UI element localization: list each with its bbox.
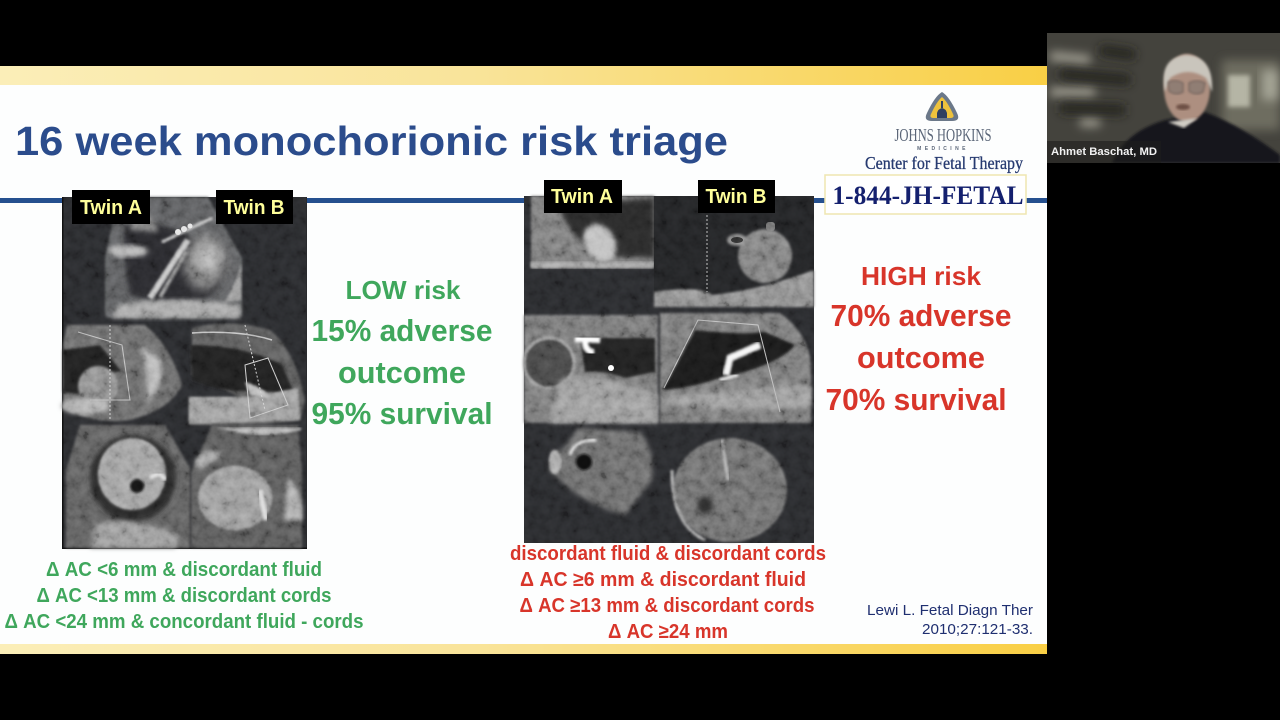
image: cord insertion twin B bbox=[660, 313, 811, 423]
icon: Johns Hopkins shield bbox=[926, 92, 958, 121]
label: Twin A bbox=[72, 190, 150, 224]
citation bbox=[867, 602, 1033, 638]
image: abdominal circumference twin B bbox=[191, 425, 302, 548]
top gold bar bbox=[0, 66, 1047, 85]
logo: Johns Hopkins Center for Fetal Therapy: MEDICINE bbox=[917, 146, 969, 152]
image: abdominal circumference twin A bbox=[66, 425, 190, 548]
image: twin A fetus top bbox=[531, 196, 654, 268]
citation: 2010;27:121-33. bbox=[922, 621, 1033, 638]
person: shoulders bbox=[1112, 112, 1280, 163]
image: abdominal section twin B bbox=[672, 438, 787, 542]
logo: Johns Hopkins Center for Fetal Therapy bbox=[865, 92, 1023, 173]
title: 16 week monochorionic risk triage bbox=[15, 118, 728, 164]
text block: low risk criteria: Δ AC <13 mm & discordant cords bbox=[36, 585, 332, 607]
text block: high risk criteria bbox=[510, 543, 826, 643]
label: Twin B: Twin B bbox=[706, 186, 766, 208]
callout: low risk: outcome bbox=[338, 355, 466, 390]
logo: Johns Hopkins Center for Fetal Therapy: JOHNS HOPKINS bbox=[894, 125, 992, 145]
bottom gold bar bbox=[0, 644, 1047, 654]
text block: high risk criteria: discordant fluid & discordant cords bbox=[510, 543, 826, 565]
phone number box: 1-844-JH-FETAL bbox=[832, 181, 1024, 210]
text block: low risk criteria: Δ AC <6 mm & discordant fluid bbox=[46, 559, 322, 581]
person: head bbox=[1164, 54, 1212, 128]
image: cord insertion twin A bbox=[524, 315, 658, 423]
label: Twin A: Twin A bbox=[80, 197, 142, 219]
label: Twin B bbox=[216, 190, 293, 224]
label: Twin A: Twin A bbox=[551, 186, 613, 208]
callout: low risk: LOW risk bbox=[346, 275, 461, 305]
image: placental insertion twin A bbox=[61, 325, 182, 421]
image: placental insertion twin B bbox=[189, 323, 305, 425]
image: cord ultrasound top bbox=[105, 197, 242, 318]
panel: low risk ultrasound montage bbox=[61, 190, 307, 549]
citation: Lewi L. Fetal Diagn Ther bbox=[867, 602, 1033, 619]
callout: high risk: 70% adverse bbox=[830, 298, 1012, 333]
image: twin B fetus top bbox=[654, 196, 814, 307]
logo: Johns Hopkins Center for Fetal Therapy: Center for Fetal Therapy bbox=[865, 153, 1023, 173]
callout: high risk: HIGH risk bbox=[861, 261, 982, 291]
panel: high risk ultrasound montage bbox=[524, 180, 814, 543]
text block: low risk criteria: Δ AC <24 mm & concordant fluid - cords bbox=[4, 611, 364, 633]
callout: low risk: 95% survival bbox=[312, 396, 492, 431]
image: abdominal section twin A bbox=[549, 428, 652, 515]
webcam: presenter video: Ahmet Baschat, MD bbox=[1051, 146, 1157, 158]
callout: high risk: outcome bbox=[857, 340, 985, 375]
webcam: presenter video bbox=[1047, 33, 1280, 163]
text block: low risk criteria bbox=[4, 559, 364, 633]
label: Twin B: Twin B bbox=[224, 197, 284, 219]
callout: low risk bbox=[312, 275, 492, 431]
callout: high risk bbox=[826, 261, 1012, 417]
callout: high risk: 70% survival bbox=[826, 382, 1006, 417]
text block: high risk criteria: Δ AC ≥6 mm & discordant fluid bbox=[520, 569, 806, 591]
label: Twin B bbox=[698, 180, 775, 213]
label: Twin A bbox=[544, 180, 622, 213]
text block: high risk criteria: Δ AC ≥24 mm bbox=[608, 621, 728, 643]
text block: high risk criteria: Δ AC ≥13 mm & discordant cords bbox=[520, 595, 814, 617]
callout: low risk: 15% adverse bbox=[312, 313, 492, 348]
slide background bbox=[0, 66, 1047, 654]
